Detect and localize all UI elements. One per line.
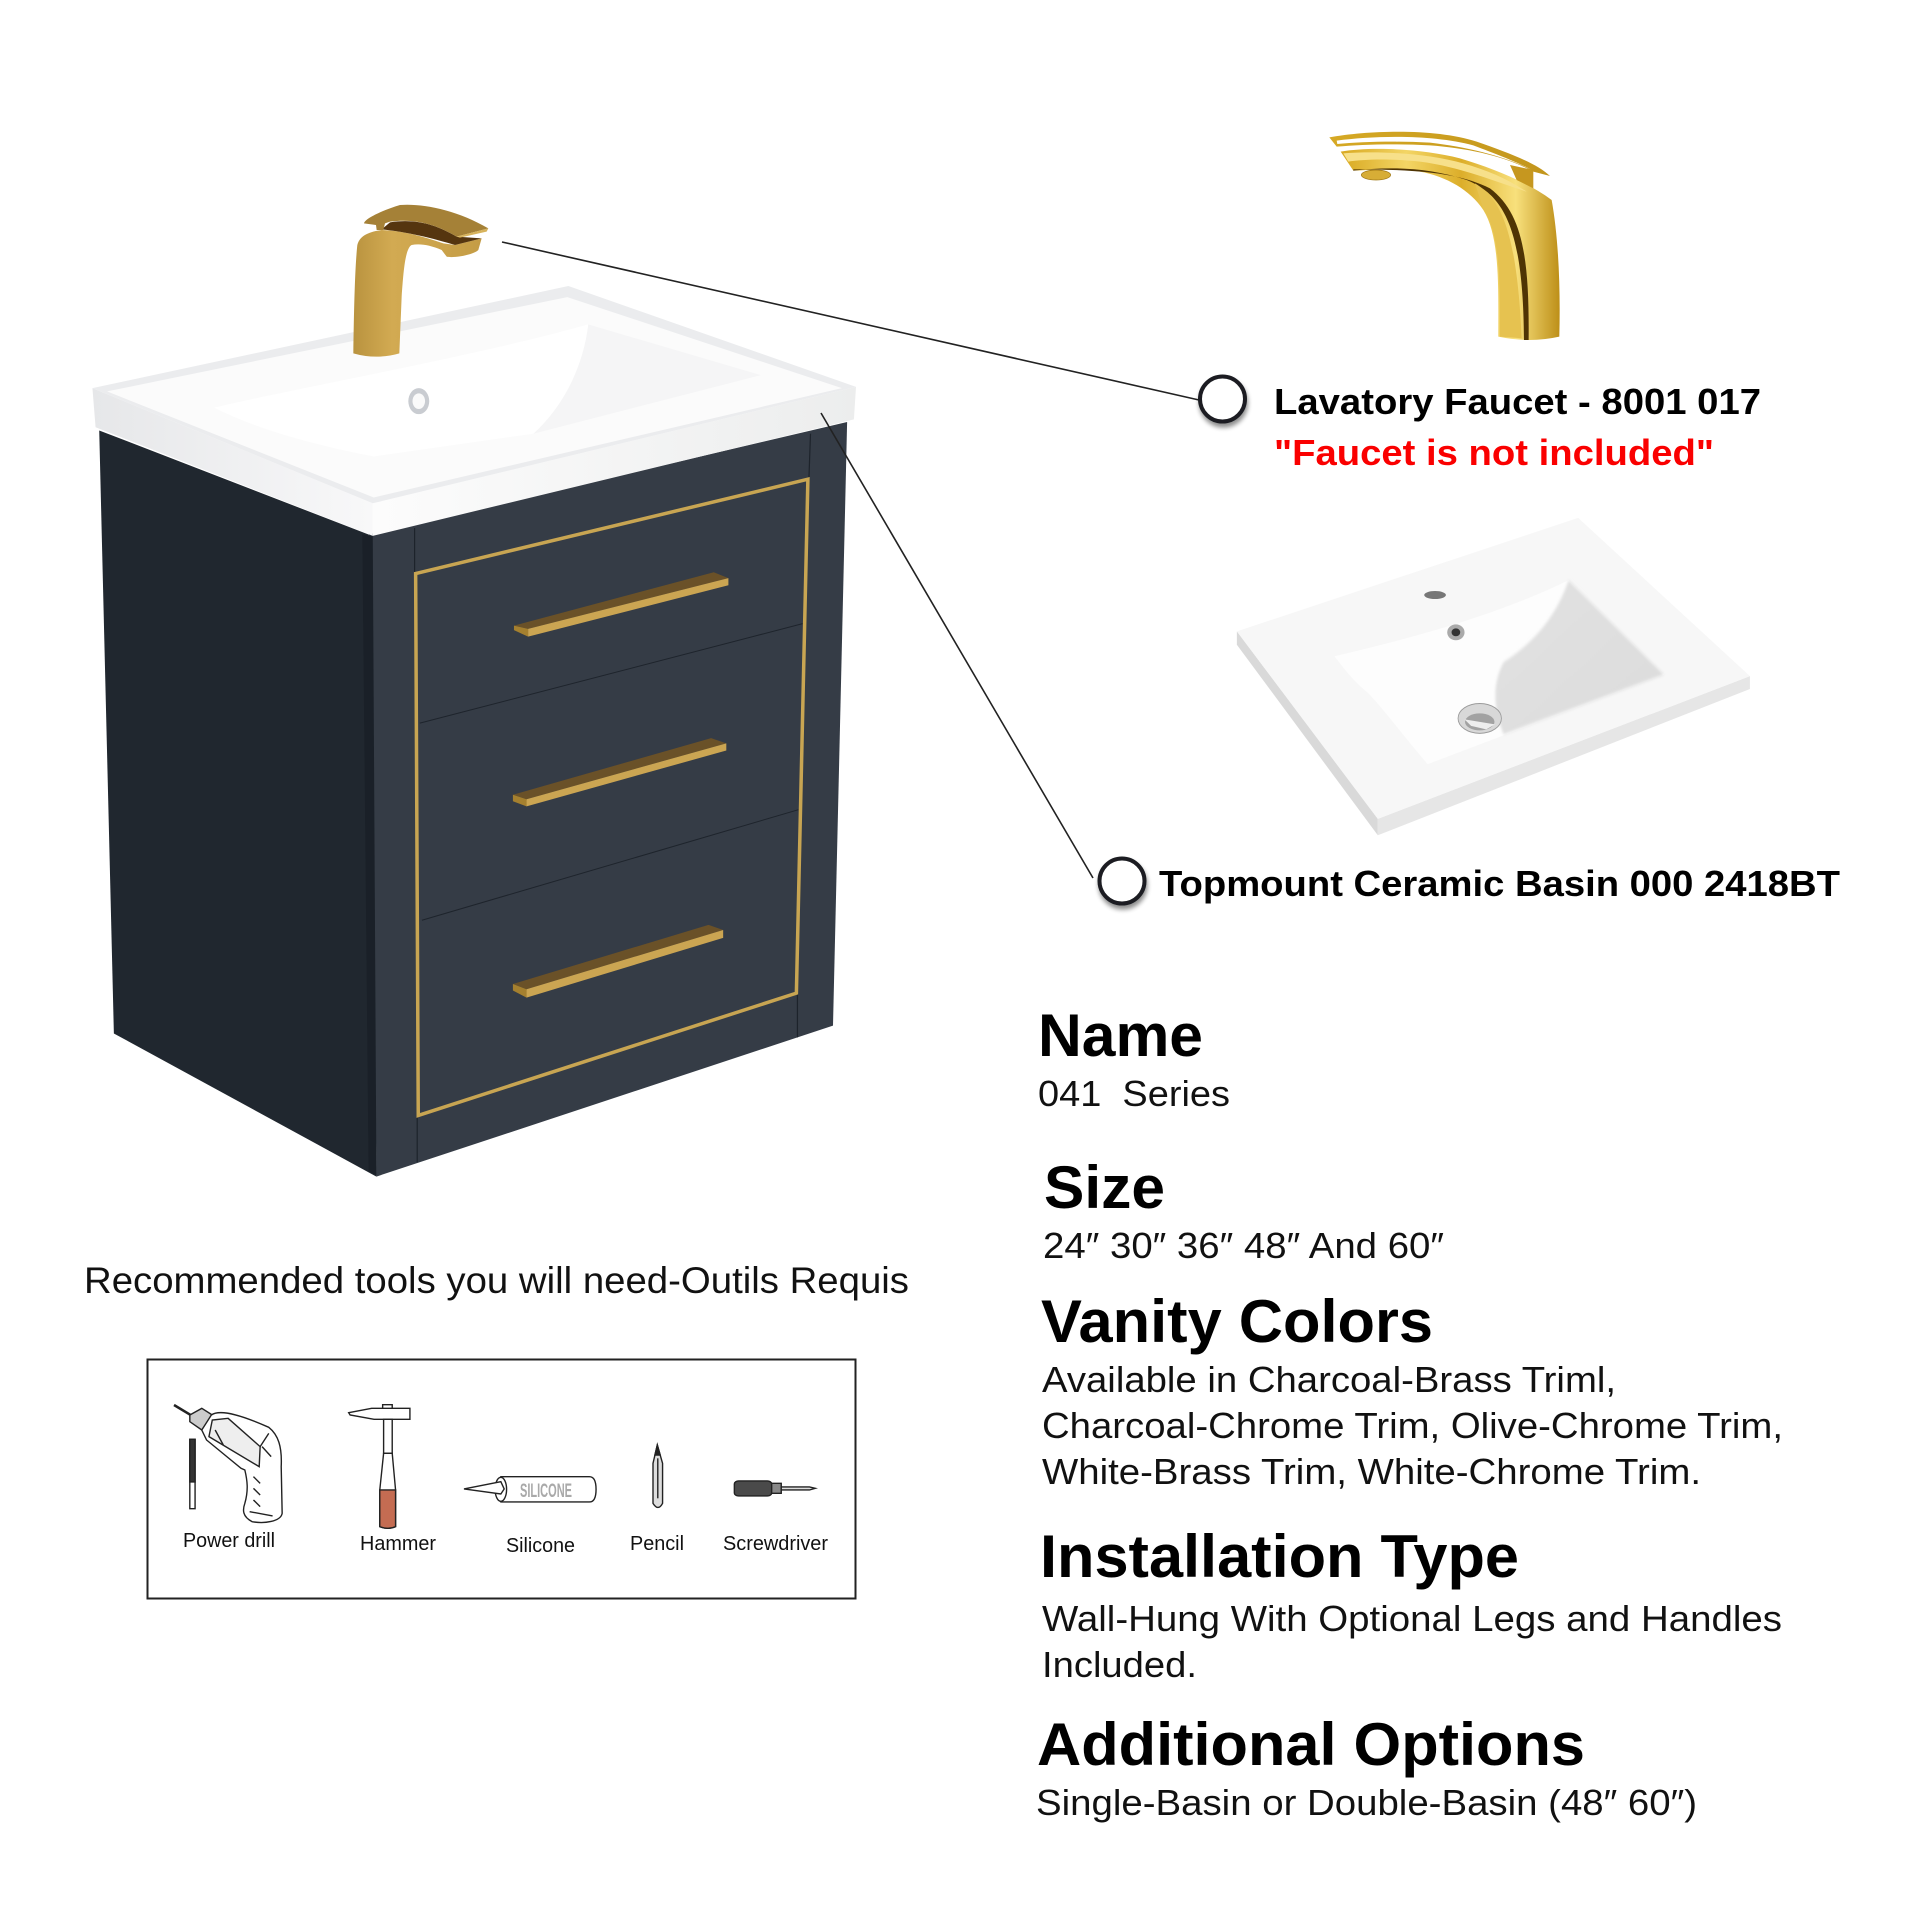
cabinet side panel [99,430,376,1177]
tool labels [183,1530,828,1557]
spec: size: Size [1044,1154,1165,1221]
spec: installation type: Included. [1042,1644,1197,1685]
tool labels: Power drill [183,1530,275,1552]
basin label: Topmount Ceramic Basin 000 2418BT [1159,863,1840,904]
drawer handle 1 [514,572,728,637]
marker ring [1100,858,1144,904]
icon: power drill [174,1405,282,1523]
spec: vanity colors: White-Brass Trim, White-Chrome Trim. [1042,1451,1701,1492]
vanity cabinet [99,422,847,1177]
callout: ceramic basin [1100,858,1840,904]
icon: pencil [653,1445,663,1507]
spec: name: 041 Series [1038,1073,1230,1114]
marker ring [1200,376,1245,422]
panel: product specifications [1036,1002,1783,1823]
leader line to faucet [502,242,1199,400]
cabinet front panel [369,422,847,1177]
brass trim frame [416,479,808,1115]
spec: vanity colors: Vanity Colors [1041,1288,1433,1355]
spec: name [1038,1002,1230,1114]
spec: size [1043,1154,1444,1266]
spec: name: Name [1038,1002,1203,1069]
drain [1458,703,1501,733]
spec: installation type [1040,1523,1782,1685]
spec: vanity colors [1041,1288,1783,1492]
spec: size: 24″ 30″ 36″ 48″ And 60″ [1043,1225,1444,1266]
drawer handle 2 [513,738,726,806]
drawer handle 3 [513,925,723,998]
spec: installation type: Installation Type [1040,1523,1519,1590]
leader line to basin [821,413,1093,878]
icon: hammer [349,1405,410,1528]
tool labels: Hammer [360,1533,436,1555]
tool labels: Silicone [506,1535,575,1557]
ceramic sink top [92,286,856,536]
icon: screwdriver [734,1481,815,1496]
tools heading: Recommended tools you will need-Outils Requis [84,1260,909,1301]
panel: recommended tools [148,1360,856,1598]
spec: vanity colors: Available in Charcoal-Brass Triml, [1042,1359,1616,1400]
spec: installation type: Wall-Hung With Optional Legs and Handles [1042,1598,1782,1639]
illustration: wall-hung vanity with sink and faucet [92,205,856,1177]
spec: additional options: Additional Options [1037,1711,1585,1778]
faucet label: Lavatory Faucet - 8001 017 [1274,381,1761,422]
product photo: ceramic basin [1237,518,1750,835]
brushed gold faucet on sink [353,205,488,357]
tool labels: Pencil [630,1533,684,1555]
spec: additional options: Single-Basin or Double-Basin (48″ 60″) [1036,1782,1697,1823]
faucet warning: "Faucet is not included" [1274,432,1714,473]
overflow [1447,624,1465,640]
tool labels: Screwdriver [723,1533,828,1555]
callout: lavatory faucet [1200,376,1761,473]
icon: silicone tube: SILICONE [520,1481,572,1502]
overflow hole [408,388,429,414]
icon: silicone tube [464,1477,596,1502]
tap hole [1424,591,1446,599]
spec: vanity colors: Charcoal-Chrome Trim, Olive-Chrome Trim, [1042,1405,1783,1446]
spec: additional options [1036,1711,1697,1823]
product photo: polished gold faucet [1329,132,1560,340]
